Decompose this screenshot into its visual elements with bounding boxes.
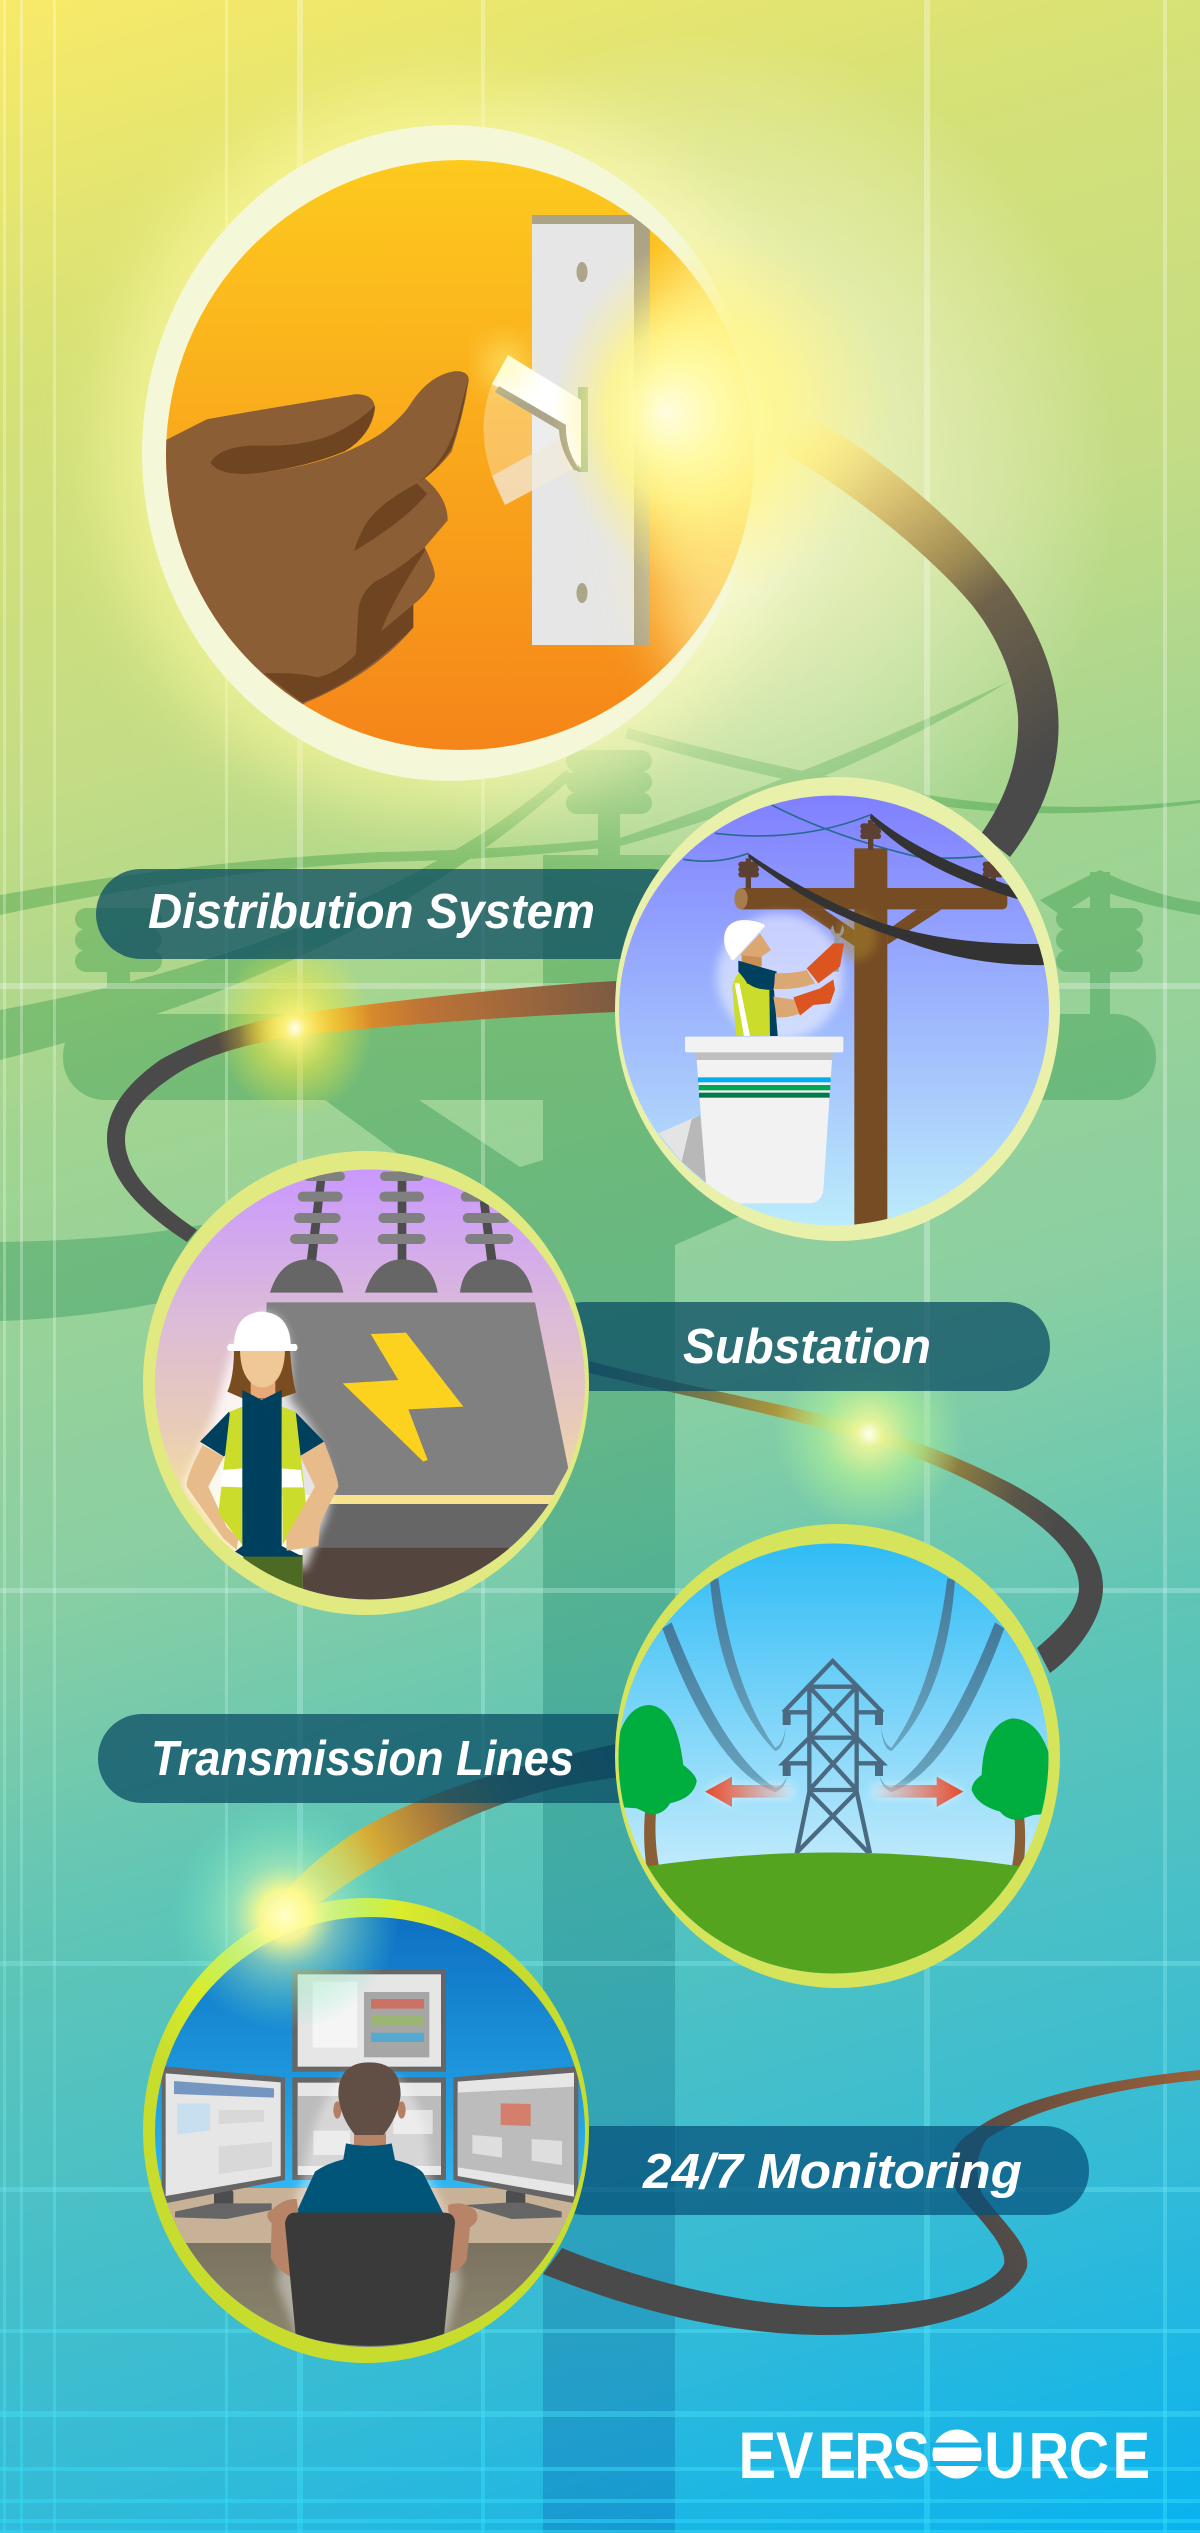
soft light on right edge of circle: [617, 240, 754, 681]
energy glow on substation cable: [774, 1339, 964, 1529]
pill: substation: Substation: [683, 1320, 931, 1374]
main light glow: [552, 233, 892, 593]
panel: substation circle: [143, 1151, 589, 1615]
icon: lineman: [724, 920, 844, 1036]
icon: wall monitors: [292, 1969, 446, 2180]
pill: 24/7 monitoring: 24/7 Monitoring: [642, 2145, 1022, 2199]
halo around switch circle: [105, 88, 795, 818]
icon: bucket: [685, 1037, 843, 1203]
worker glow: [183, 1313, 330, 1570]
energy glow at monitoring circle: [170, 1800, 400, 2030]
energy glow on distribution cable: [217, 940, 373, 1116]
icon: transmission wires: [662, 1578, 1004, 1792]
panel: transmission lines circle: [613, 1524, 1060, 1988]
icon: lattice tower: [783, 1661, 883, 1853]
icon: trees: [613, 1705, 1053, 1868]
icon: switch plate: [484, 215, 650, 645]
pill: distribution system: [96, 869, 696, 959]
pill: transmission lines: Transmission Lines: [151, 1732, 574, 1786]
ground: [648, 1852, 1020, 1974]
toggle glow: [483, 341, 527, 389]
icon: boom arm: [658, 1115, 707, 1183]
icon: transformer: [260, 1302, 568, 1495]
panel: distribution system circle: [615, 777, 1060, 1242]
panel: 24/7 monitoring circle: [143, 1898, 590, 2363]
background silhouette: utility pole and wires: [0, 681, 1200, 2533]
icon: operator from behind: [267, 2062, 477, 2346]
icon: left monitor: [162, 2066, 285, 2219]
icon: right monitor: [453, 2066, 578, 2219]
person glow: [277, 2070, 460, 2333]
worker glow: [717, 913, 843, 1040]
icon: wrench: [831, 925, 844, 972]
cable: substation to transmission: [589, 1361, 1103, 1673]
pill: distribution system: Distribution System: [148, 885, 595, 939]
floor and desk: [150, 2188, 590, 2243]
icon: insulators: [738, 820, 1003, 888]
cable: switch to distribution: [781, 409, 1059, 857]
cable: monitoring to exit: [543, 2070, 1200, 2335]
icon: arrows showing clearance: [705, 1777, 963, 1807]
icon: insulator stacks: [270, 1170, 533, 1293]
heavy wires: [748, 853, 1045, 965]
logo: Eversource: EVERSOURCE: [739, 2419, 1150, 2492]
panel: light switch circle: [142, 125, 754, 781]
icon: lightning bolt: [343, 1333, 463, 1462]
icon: utility pole: [741, 848, 1007, 1242]
pill: substation: [540, 1302, 1050, 1391]
cable: distribution to substation: [107, 981, 616, 1242]
pill: transmission lines: [98, 1714, 678, 1803]
icon: substation worker: [187, 1312, 338, 1612]
wide light glow behind switch circle: [280, 30, 1120, 910]
pill: 24/7 monitoring: [540, 2126, 1089, 2215]
icon: hand: [166, 371, 469, 704]
cable: transmission to monitoring: [262, 1743, 620, 1925]
